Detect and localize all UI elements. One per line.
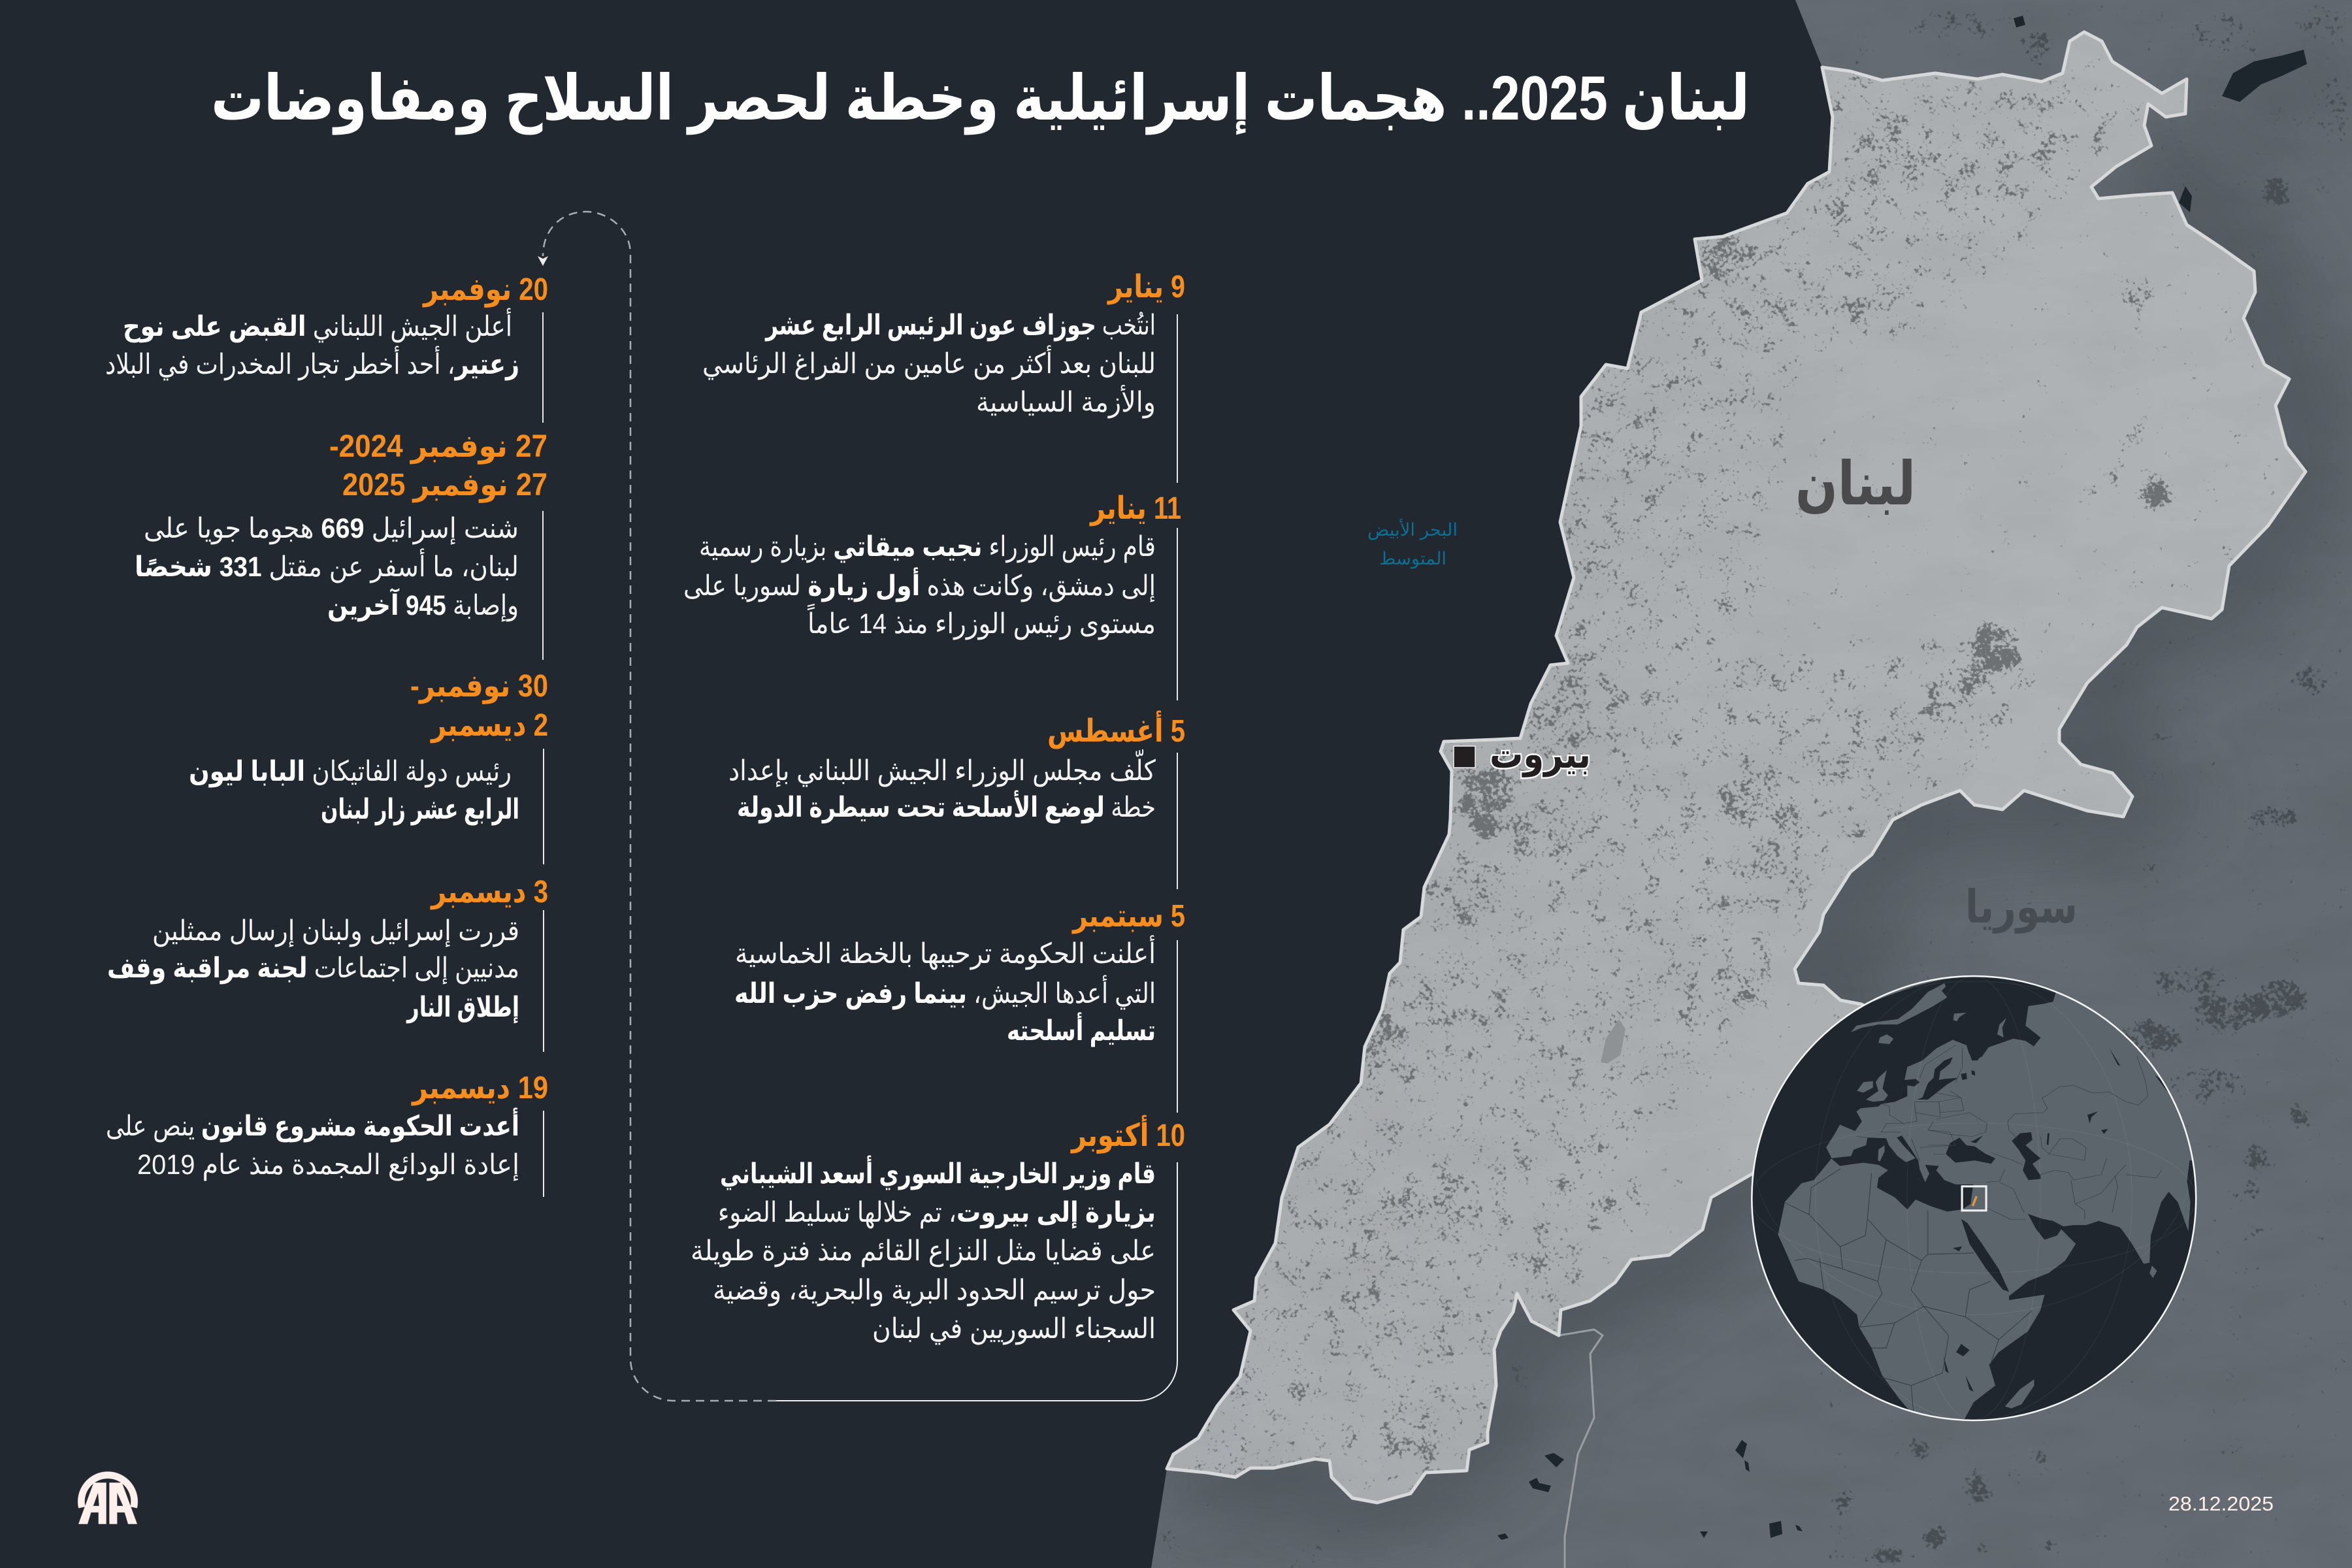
date: 10 October: 10 أكتوبر	[1070, 1115, 1185, 1154]
timeline entry: 9 January	[702, 270, 1185, 483]
map: Israel-Syria border line	[1559, 1330, 1603, 1568]
body: 10 October: قام وزير الخارجية السوري أسعد الشيباني	[720, 1155, 1156, 1190]
body: 9 January	[702, 310, 1156, 419]
globe inset	[1657, 873, 2240, 1425]
timeline entry: 30 November to 2 December	[189, 669, 548, 864]
map: neighbouring land	[1150, 0, 2352, 1568]
date: 20 November: 20 نوفمبر	[422, 272, 548, 308]
timeline entry: 19 December	[106, 1071, 548, 1197]
body: 19 December: أعدت الحكومة مشروع قانون ينص على	[106, 1107, 519, 1143]
body: 11 January	[683, 531, 1156, 640]
body: 9 January: والأزمة السياسية	[976, 384, 1156, 419]
timeline entry: 3 December	[107, 875, 548, 1052]
label: Mediterranean Sea: البحر الأبيض	[1367, 518, 1458, 540]
body: 3 December: إطلاق النار	[406, 992, 519, 1024]
body: 10 October: حول ترسيم الحدود البرية والبحرية، وقضية	[713, 1275, 1156, 1307]
body: 5 August: كلّف مجلس الوزراء الجيش اللبناني بإعداد	[728, 749, 1156, 787]
timeline entry: 27 November 2024 to 27 November 2025	[135, 429, 547, 660]
body: 10 October: السجناء السوريين في لبنان	[872, 1313, 1156, 1345]
map: Lebanon territory	[1150, 0, 2352, 1568]
body: 10 October: على قضايا مثل النزاع القائم منذ فترة طويلة	[691, 1235, 1156, 1267]
body: 9 January: انتُخب جوزاف عون الرئيس الرابع عشر	[764, 310, 1156, 342]
label: Beirut with marker: بيروت	[1490, 732, 1591, 777]
date: 11 January: 11 يناير	[1089, 491, 1181, 527]
body: 3 December: مدنيين إلى اجتماعات لجنة مراقبة وقف	[107, 953, 519, 985]
body: 3 December: قررت إسرائيل ولبنان إرسال ممثلين	[152, 915, 519, 947]
globe: African borders	[1784, 1169, 2032, 1411]
timeline entry: 5 September	[734, 899, 1185, 1113]
body: 5 September	[734, 935, 1156, 1047]
body: 10 October	[691, 1155, 1156, 1345]
body: 669 air strikes: لبنان، ما أسفر عن مقتل 331 شخصًا	[135, 548, 519, 583]
body: 20 November	[105, 308, 519, 381]
body: 669 air strikes	[135, 513, 519, 622]
date range: 27 November 2024 - 27 November 2025	[329, 429, 547, 503]
body: 669 air strikes: وإصابة 945 آخرين	[327, 588, 519, 622]
date: 9 January: 9 يناير	[1107, 270, 1185, 305]
body: 5 September: أعلنت الحكومة ترحيبها بالخطة الخماسية	[735, 935, 1156, 970]
body: Pope visit: رئيس دولة الفاتيكان البابا ليون	[189, 756, 512, 788]
globe: locator square	[1962, 1186, 1986, 1211]
body: 9 January: للبنان بعد أكثر من عامين من الفراغ الرئاسي	[702, 345, 1156, 380]
timeline entry: 20 November	[105, 272, 548, 423]
body: Pope visit: الرابع عشر زار لبنان	[321, 794, 519, 826]
body: 5 August	[728, 749, 1156, 824]
body: Pope visit	[189, 756, 519, 826]
date: 5 August: 5 أغسطس	[1047, 710, 1185, 749]
globe: Lebanon highlight	[1972, 1196, 1978, 1206]
date: 19 December: 19 ديسمبر	[411, 1071, 548, 1106]
globe: graticule	[1752, 976, 2196, 1420]
body: 11 January: قام رئيس الوزراء نجيب ميقاتي بزيارة رسمية	[699, 531, 1156, 563]
date: 3 December: 3 ديسمبر	[430, 875, 548, 910]
date stamp: 28.12.2025	[2168, 1492, 2274, 1515]
map: Qaraoun lake	[1601, 1019, 1625, 1064]
globe: Atlantic and Arctic oceans	[1675, 930, 2074, 1234]
label: Mediterranean Sea: المتوسط	[1379, 549, 1446, 569]
body: 19 December: إعادة الودائع المجمدة منذ عام 2019	[137, 1149, 519, 1181]
label: Syria: سوريا	[1965, 881, 2078, 934]
body: 19 December	[106, 1107, 519, 1181]
label: Lebanon: لبنان	[1795, 451, 1916, 517]
date range: 30 November - 2 December: 30 نوفمبر-	[410, 669, 548, 704]
globe: African seas, lakes	[1944, 1075, 2174, 1392]
timeline entry: 10 October	[691, 1115, 1185, 1345]
timeline entry: 5 August	[728, 710, 1185, 889]
globe: Eurasian borders	[1856, 1045, 2162, 1219]
title: لبنان 2025.. هجمات إسرائيلية وخطة لحصر السلاح ومفاوضات	[211, 63, 1750, 135]
date range: 27 November 2024 - 27 November 2025: 27 نوفمبر 2025	[342, 468, 547, 503]
label: Beirut with marker	[1454, 732, 1591, 777]
date range: 30 November - 2 December	[410, 669, 548, 743]
body: 669 air strikes: شنت إسرائيل 669 هجوما جويا على	[144, 513, 519, 545]
body: 10 October: بزيارة إلى بيروت، تم خلالها تسليط الضوء	[718, 1197, 1156, 1229]
body: 20 November: أعلن الجيش اللبناني القبض على نوح	[123, 308, 512, 343]
globe: main landmass	[1657, 873, 2240, 1425]
globe: Arctic and Atlantic islands	[1851, 979, 2006, 1162]
timeline path: dashed and solid route with arrow	[538, 212, 1177, 1401]
body: 5 September: تسليم أسلحته	[1007, 1012, 1156, 1047]
date range: 27 November 2024 - 27 November 2025: 27 نوفمبر 2024-	[329, 429, 547, 465]
body: 11 January: إلى دمشق، وكانت هذه أول زيارة لسوريا على	[683, 567, 1156, 602]
globe: African islands	[2005, 1266, 2157, 1409]
timeline entry: 11 January	[683, 491, 1181, 700]
date: 5 September: 5 سبتمبر	[1071, 899, 1185, 934]
label: Mediterranean Sea	[1367, 518, 1458, 569]
body: 5 September: التي أعدها الجيش، بينما رفض حزب الله	[734, 975, 1156, 1010]
body: 3 December	[107, 915, 519, 1024]
globe: Mediterranean, Baltic, Black and Caspian seas	[1831, 1049, 2121, 1211]
date range: 30 November - 2 December: 2 ديسمبر	[430, 708, 548, 743]
body: 5 August: خطة لوضع الأسلحة تحت سيطرة الدولة	[737, 790, 1156, 824]
logo: Anadolu Agency	[78, 1475, 137, 1524]
globe: northern hemisphere detail	[1675, 930, 2162, 1234]
body: 11 January: مستوى رئيس الوزراء منذ 14 عاماً	[807, 604, 1156, 640]
body: 20 November: زعتير، أحد أخطر تجار المخدرات في البلاد	[105, 346, 519, 381]
